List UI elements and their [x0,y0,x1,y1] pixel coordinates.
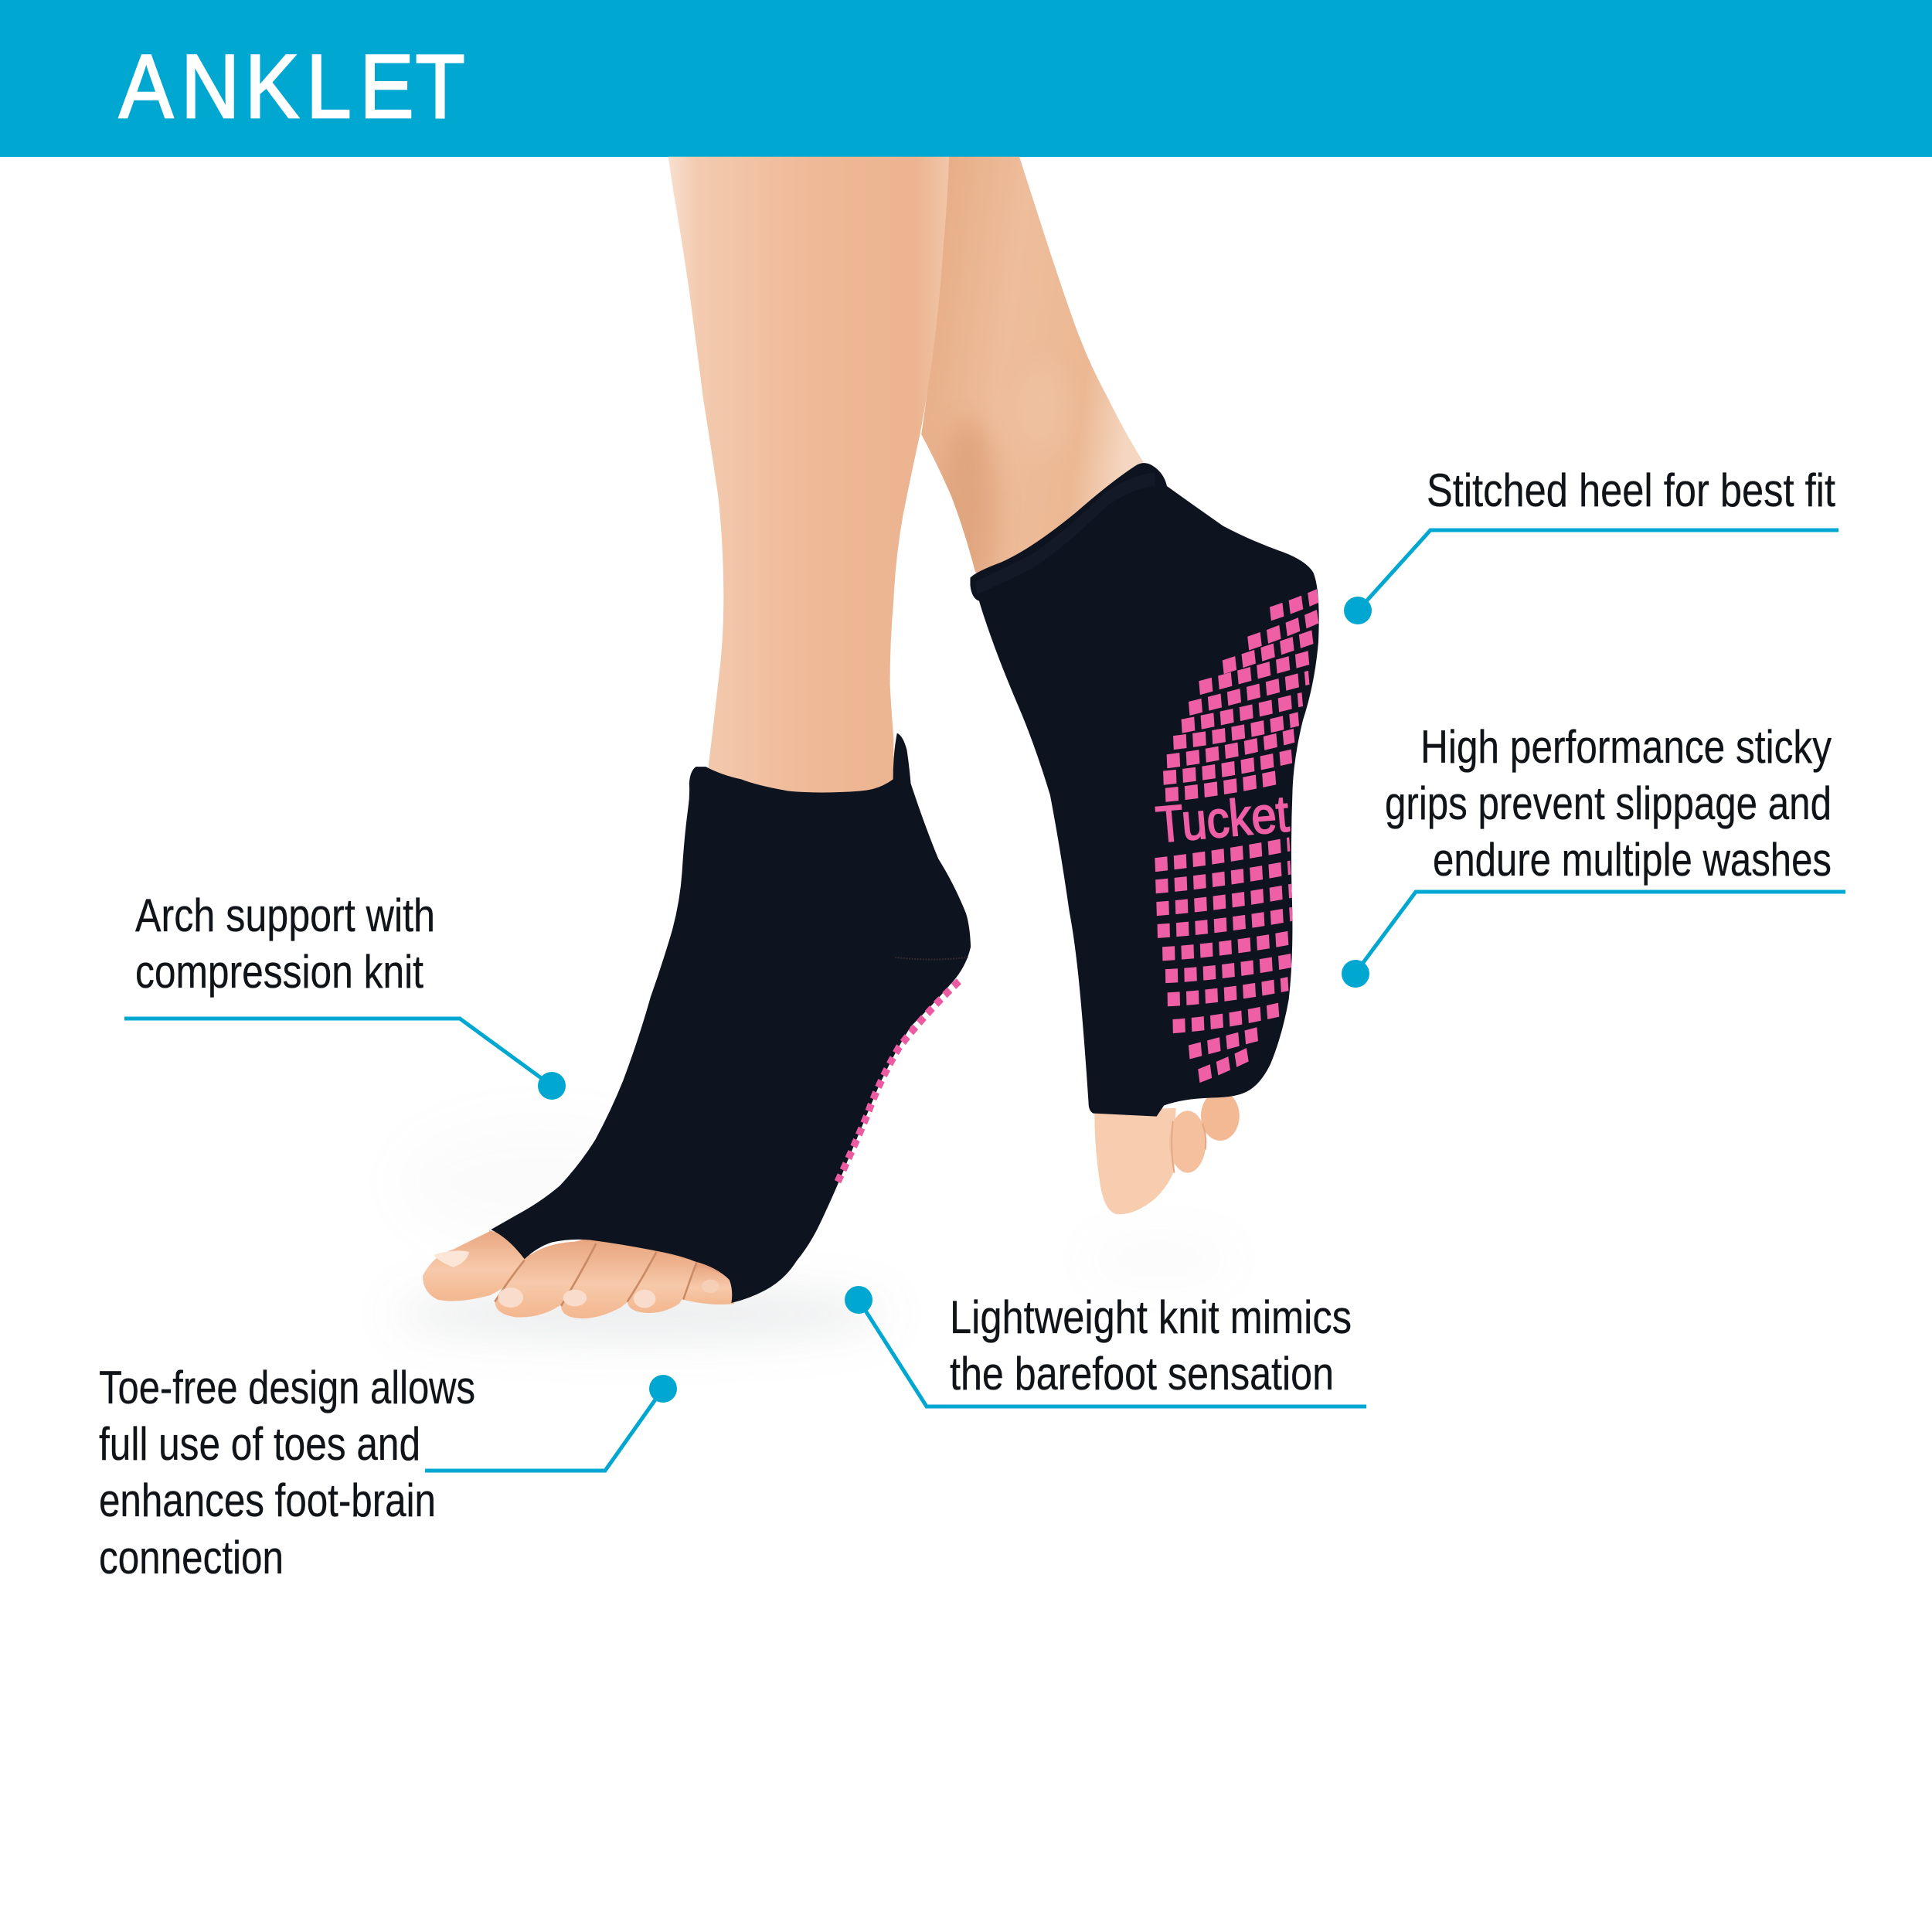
callout: toe-free design: connection [99,1532,284,1583]
brand logo on sole: Tucket [1154,784,1291,853]
callout: arch support: compression knit [135,946,423,998]
right sock (lifted foot) [970,463,1319,1214]
callout: toe-free design: full use of toes and [99,1418,420,1470]
callout: lightweight knit: the barefoot sensation [950,1348,1334,1400]
heel seam [895,957,968,960]
side grip dots [836,981,959,1185]
callout: lightweight knit: Lightweight knit mimics [950,1291,1352,1343]
callout: sticky grips [1342,721,1845,988]
sock rim [976,479,1155,588]
callout: stitched heel: Stitched heel for best fit [1427,464,1835,516]
callout: sticky grips: High performance sticky [1420,721,1832,773]
callout: arch support: Arch support with [135,889,435,941]
back leg [921,157,1151,596]
header band [0,0,1932,157]
sock body [491,733,971,1303]
callout: toe-free design: Toe-free design allows [99,1362,475,1413]
title: ANKLET [119,36,465,137]
callout: sticky grips: grips prevent slippage and [1385,777,1832,829]
callout: arch support [124,889,566,1100]
callout: toe-free design: enhances foot-brain [99,1475,436,1526]
sock body [970,463,1319,1117]
toes [423,1230,734,1318]
lifted foot sole and toes [1094,1091,1240,1214]
callout: lightweight knit [845,1286,1366,1406]
callout: stitched heel [1344,464,1838,624]
left sock (planted foot) [423,733,971,1318]
callout: toe-free design [99,1362,677,1583]
grip dots lower [1155,844,1292,1076]
callout: sticky grips: endure multiple washes [1433,834,1832,886]
grip dots upper [1163,596,1318,795]
front leg [668,157,949,793]
floor shadow [394,1121,1229,1341]
